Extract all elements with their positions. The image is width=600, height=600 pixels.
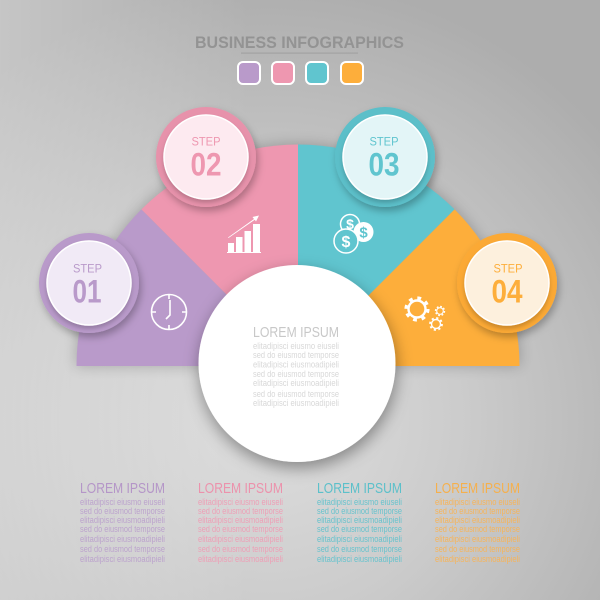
step 02 badge — [156, 107, 256, 207]
text column: purple: elitadipisci eiusmo eiuseli — [80, 497, 165, 507]
text column: orange: elitadipisci eiusmoadipieli — [435, 554, 520, 564]
text column: teal: sed do eiusmod temporse — [317, 524, 402, 534]
text column: purple: sed do eiusmod temporse — [80, 544, 165, 554]
fan shadow — [76, 144, 520, 366]
text column: pink: sed do eiusmod temporse — [198, 524, 283, 534]
text column: orange — [435, 481, 520, 564]
text column: orange: elitadipisci eiusmoadipieli — [435, 534, 520, 544]
centre text — [253, 325, 339, 408]
text column: teal: LOREM IPSUM — [317, 481, 402, 497]
text column: purple: elitadipisci eiusmoadipieli — [80, 554, 165, 564]
step 02 badge: 02 — [190, 146, 222, 182]
text column: pink: LOREM IPSUM — [198, 481, 283, 497]
icon: bar chart with arrow — [227, 216, 261, 253]
text column: orange: elitadipisci eiusmoadipieli — [435, 515, 520, 525]
text column: purple: elitadipisci eiusmoadipieli — [80, 515, 165, 525]
step 04 badge: 04 — [492, 274, 523, 310]
text column: pink: elitadipisci eiusmoadipieli — [198, 515, 283, 525]
icon: dollar coins: $ — [346, 216, 354, 232]
colour legend swatches — [238, 62, 363, 84]
icon: dollar coins — [334, 214, 374, 253]
fan segment: pink — [141, 144, 298, 366]
text column: orange: sed do eiusmod temporse — [435, 506, 520, 516]
step 03 badge — [335, 107, 435, 207]
centre text: elitadipisci eiusmoadipieli — [253, 360, 339, 370]
text column: purple: LOREM IPSUM — [80, 481, 165, 497]
icon: dollar coins: $ — [359, 224, 368, 242]
text column: purple: sed do eiusmod temporse — [80, 506, 165, 516]
text column: pink: sed do eiusmod temporse — [198, 506, 283, 516]
text column: purple: elitadipisci eiusmoadipieli — [80, 534, 165, 544]
text column: orange: elitadipisci eiusmo eiuseli — [435, 497, 520, 507]
text column: teal: elitadipisci eiusmoadipieli — [317, 515, 402, 525]
icon: gears — [406, 298, 444, 330]
centre text: elitadipisci eiusmo eiuseli — [253, 341, 339, 351]
step 04 badge: STEP — [494, 262, 522, 276]
centre text: elitadipisci eiusmoadipieli — [253, 378, 339, 388]
centre text: elitadipisci eiusmoadipieli — [253, 398, 339, 408]
text column: pink: elitadipisci eiusmo eiuseli — [198, 497, 283, 507]
text column: orange: LOREM IPSUM — [435, 481, 520, 497]
step 01 badge: STEP — [73, 262, 102, 276]
step 01 badge: 01 — [72, 274, 102, 310]
centre circle — [198, 265, 396, 462]
text column: purple: sed do eiusmod temporse — [80, 524, 165, 534]
text column: teal — [317, 481, 402, 564]
icon: clock — [152, 294, 186, 330]
text column: teal: sed do eiusmod temporse — [317, 506, 402, 516]
text column: teal: elitadipisci eiusmo eiuseli — [317, 497, 402, 507]
text column: pink: elitadipisci eiusmoadipieli — [198, 554, 283, 564]
step 01 badge — [39, 233, 139, 333]
title: BUSINESS INFOGRAPHICS — [195, 33, 404, 52]
text column: teal: elitadipisci eiusmoadipieli — [317, 534, 402, 544]
fan segment: teal — [298, 144, 455, 366]
icon: dollar coins: $ — [342, 234, 351, 251]
text column: orange: sed do eiusmod temporse — [435, 524, 520, 534]
text column: pink: sed do eiusmod temporse — [198, 544, 283, 554]
step 03 badge: STEP — [370, 134, 398, 148]
step 02 badge: STEP — [192, 134, 220, 148]
fan segment: purple — [76, 209, 298, 366]
centre text: sed do eiusmod temporse — [253, 350, 339, 360]
text column: pink: elitadipisci eiusmoadipieli — [198, 534, 283, 544]
step 04 badge — [457, 233, 557, 333]
text column: teal: elitadipisci eiusmoadipieli — [317, 554, 402, 564]
centre text: LOREM IPSUM — [253, 325, 339, 341]
text column: orange: sed do eiusmod temporse — [435, 544, 520, 554]
centre text: sed do eiusmod temporse — [253, 389, 339, 399]
text column: pink — [198, 481, 283, 564]
centre text: sed do eiusmod temporse — [253, 369, 339, 379]
fan segment: orange — [298, 209, 520, 366]
text column: purple — [80, 481, 165, 564]
text column: teal: sed do eiusmod temporse — [317, 544, 402, 554]
step 03 badge: 03 — [368, 146, 400, 182]
